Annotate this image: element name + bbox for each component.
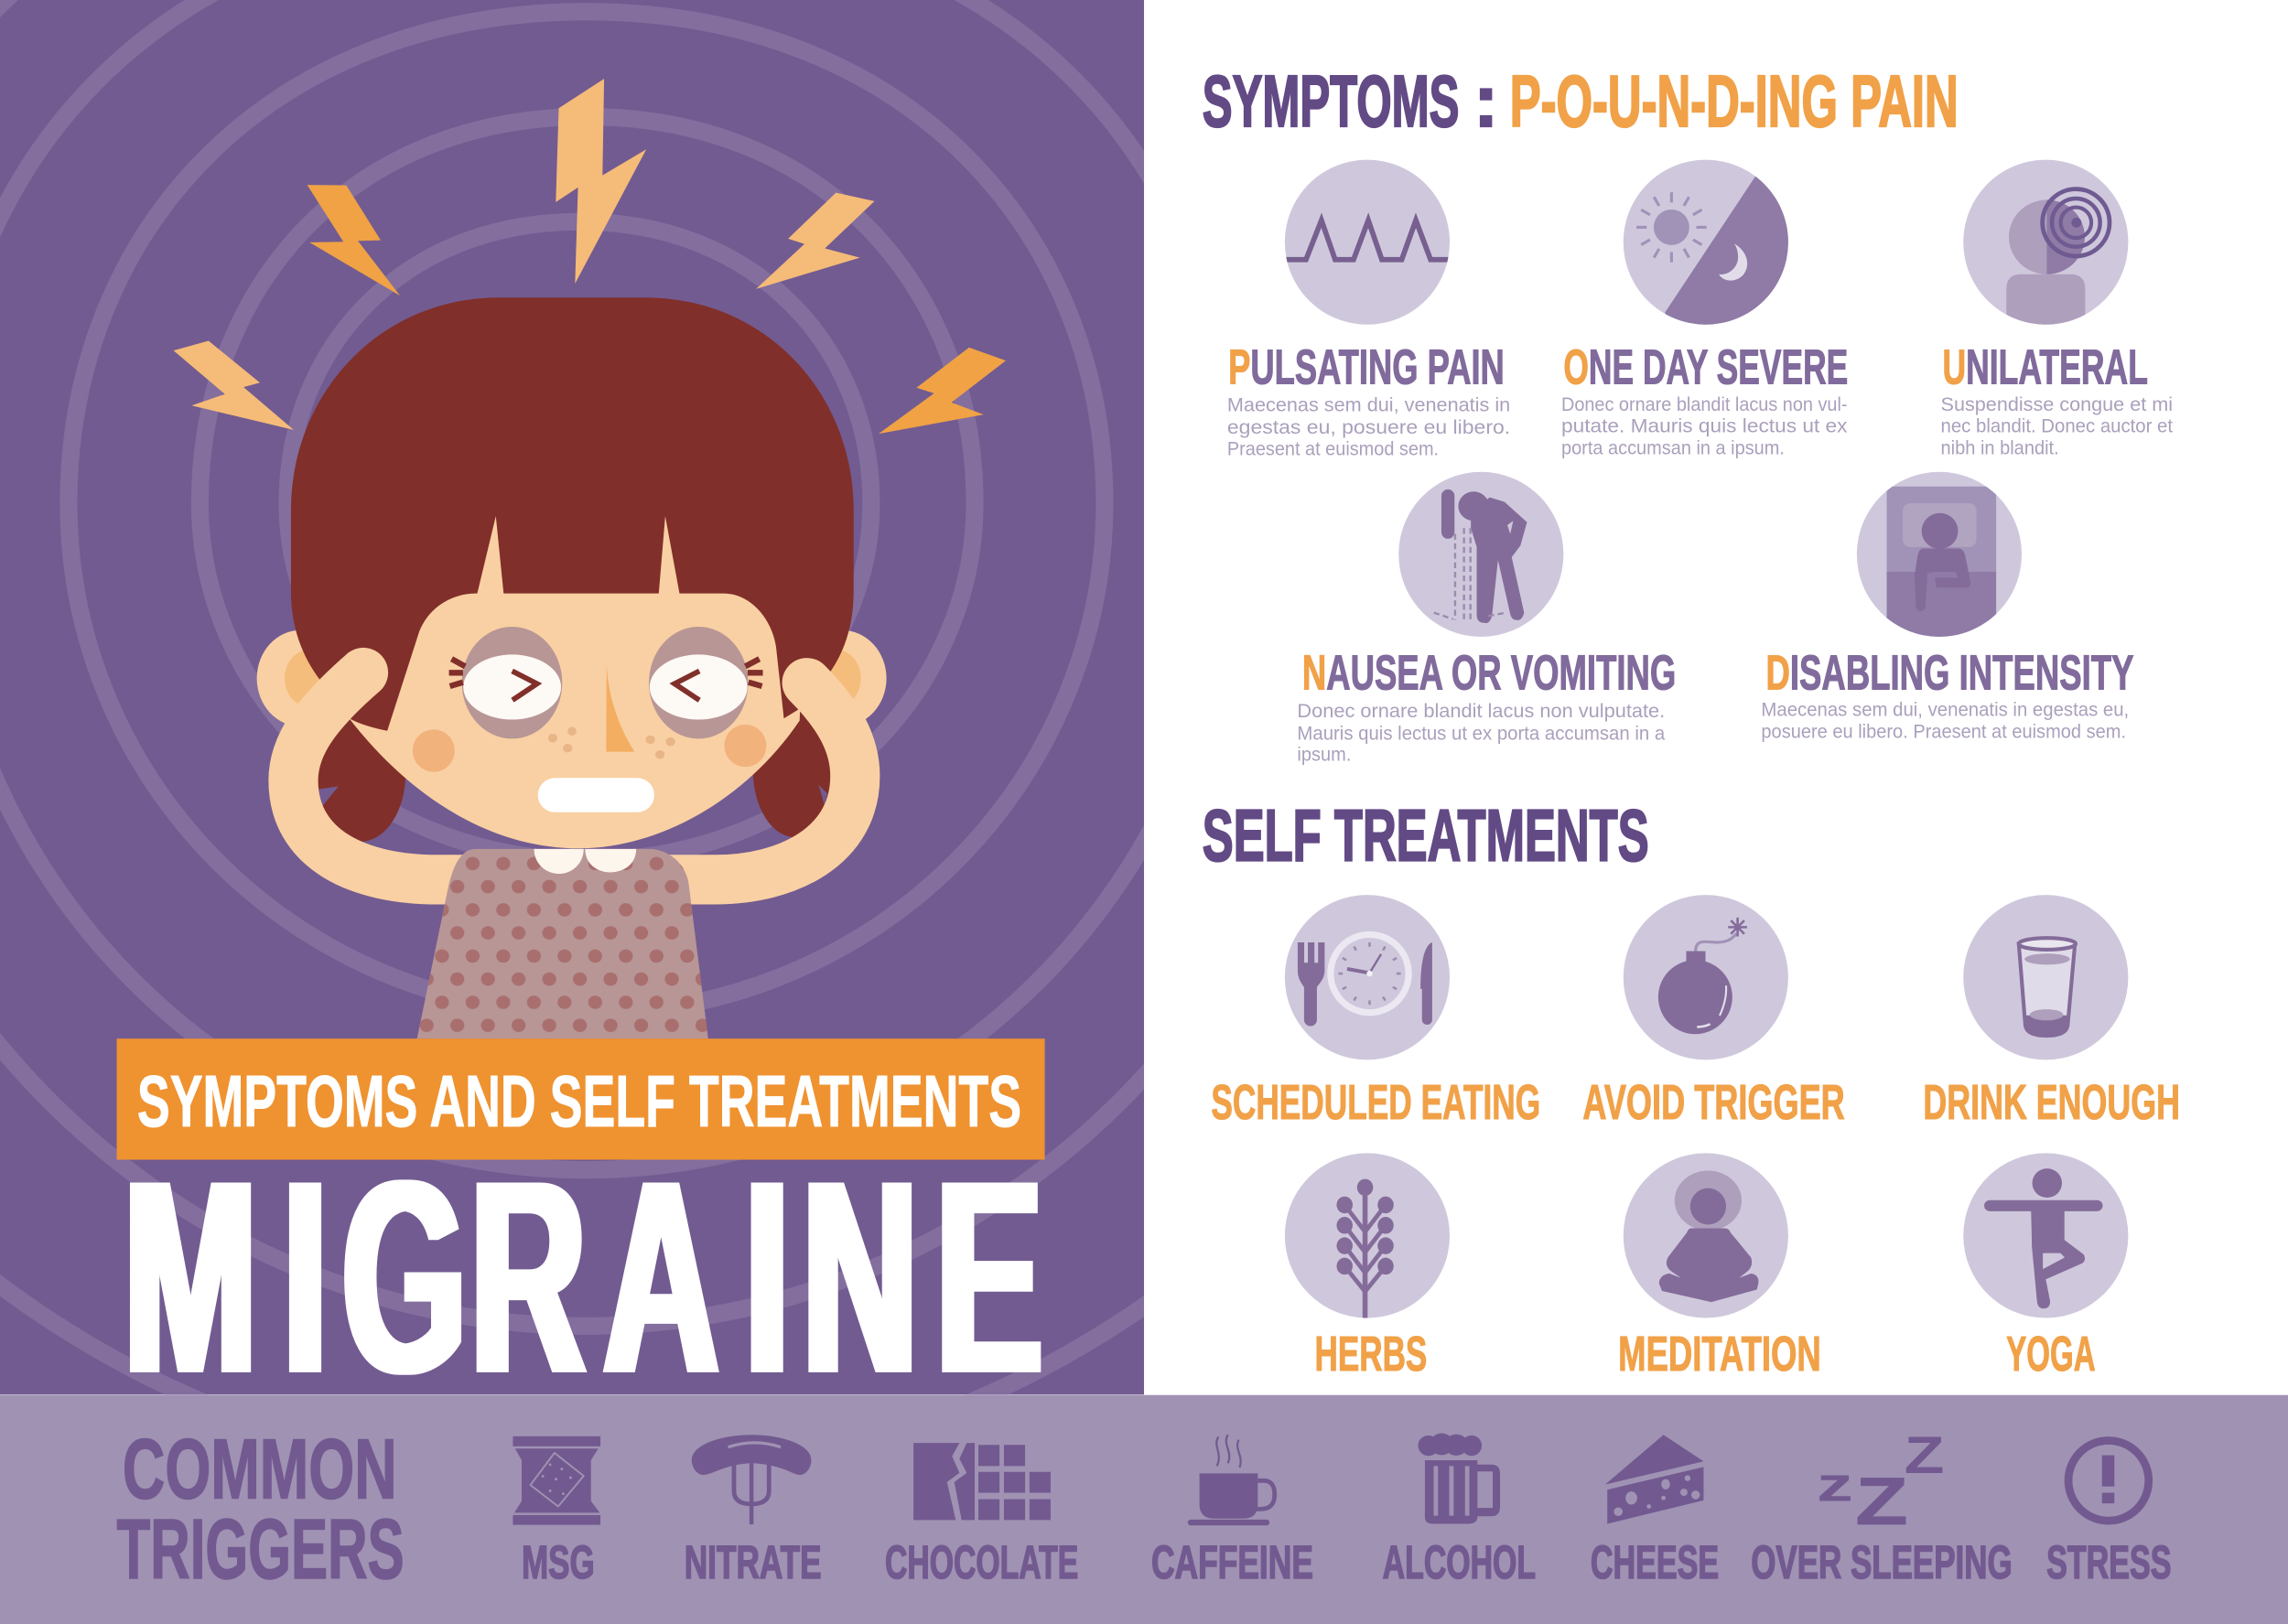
icon: person in bed [1887,487,1996,645]
icon: sun and moon [1636,177,1788,325]
symptom: pulsating pain: egestas eu, posuere eu libero. [1227,415,1510,438]
symptom: one day severe: Donec ornare blandit lacus non vul- [1561,393,1847,415]
symptom: unilateral: nec blandit. Donec auctor et [1941,414,2173,437]
treatment: yoga: YOGA [2006,1328,2096,1382]
heading: common triggers: TRIGGERS [117,1501,405,1597]
icon: sausage on fork [692,1435,811,1524]
icon: beer mug [1418,1433,1500,1523]
panel: left purple hero [0,0,1144,1394]
icon: zzz: z [1817,1458,1853,1512]
icon: head with one-sided pain [2006,189,2110,339]
symptom: unilateral: Suspendisse congue et mi [1941,393,2173,415]
icon: cracker pack [513,1436,600,1525]
icon: glass of water [2019,938,2076,1036]
treatment: avoid trigger: AVOID TRIGGER [1582,1076,1845,1130]
icon: zzz: Z [1905,1426,1945,1485]
treatment: meditation [1618,1153,1821,1382]
heading: common triggers [117,1421,405,1597]
icon: pulse wave [1284,220,1451,260]
trigger: caffeine: CAFFEINE [1151,1536,1313,1588]
treatment: avoid trigger [1582,895,1845,1130]
symptom: disabling intensity [1761,472,2133,743]
symptom: unilateral: UNILATERAL [1942,340,2148,394]
symptom: pulsating pain: Praesent at euismod sem. [1227,437,1439,460]
icon: yoga pose [1984,1168,2103,1308]
icon: cheese wedge [1605,1435,1703,1523]
trigger: over sleeping: OVER SLEEPING [1751,1536,2013,1588]
treatment: drink enough [1923,895,2180,1130]
treatment: scheduled eating [1211,895,1540,1130]
illustration: girl with headache [257,297,887,1038]
symptom: disabling intensity: Maecenas sem dui, venenatis in egestas eu, [1761,698,2129,721]
symptom: disabling intensity: DISABLING INTENSITY [1766,646,2133,700]
symptom: nausea or vomiting: Donec ornare blandit lacus non vulputate. [1297,699,1665,722]
heading: symptoms: : [1473,60,1498,142]
heading: self treatments: SELF TREATMENTS [1203,795,1649,877]
icon: herb sprig [1336,1179,1394,1318]
heading: symptoms: P-O-U-N-D-ING PAIN [1510,60,1959,142]
title: MIGRAINE [124,1124,1042,1432]
symptom: nausea or vomiting: ipsum. [1297,743,1351,766]
subtitle banner [117,1038,1045,1160]
symptom: nausea or vomiting [1297,472,1676,766]
trigger: caffeine [1151,1435,1313,1588]
symptom: one day severe: ONE DAY SEVERE [1563,340,1848,394]
heading: symptoms: SYMPTOMS [1203,60,1459,142]
trigger: stress: STRESS [2046,1536,2171,1588]
icon: zzz [1817,1426,1945,1539]
icon: person vomiting [1434,491,1527,623]
symptom: pulsating pain [1227,160,1510,460]
treatment: herbs [1285,1153,1450,1382]
treatment: herbs: HERBS [1315,1328,1427,1382]
trigger: nitrate: NITRATE [685,1536,822,1588]
trigger: cheese: CHEESE [1591,1536,1719,1588]
trigger: over sleeping [1751,1426,2013,1588]
heading: symptoms [1203,60,1959,142]
trigger: nitrate [685,1435,822,1588]
trigger: alcohol [1383,1433,1536,1588]
symptom: pulsating pain: PULSATING PAIN [1228,340,1505,394]
symptom: unilateral: nibh in blandit. [1941,436,2059,459]
treatment: scheduled eating: SCHEDULED EATING [1211,1076,1540,1130]
icon: lightning bolts [174,79,1006,434]
icon: warning circle [2068,1440,2149,1521]
trigger: chocolate: CHOCOLATE [885,1536,1078,1588]
treatment: yoga [1963,1153,2128,1382]
symptom: nausea or vomiting: NAUSEA OR VOMITING [1302,646,1676,700]
symptom: pulsating pain: Maecenas sem dui, venenatis in [1227,393,1510,416]
icon: meditating figure [1659,1170,1758,1302]
panel: symptoms [1203,60,2173,766]
trigger: MSG [513,1436,600,1588]
heading: common triggers: COMMON [123,1421,397,1516]
panel: common triggers strip [0,1395,2288,1624]
trigger: stress [2046,1440,2171,1588]
trigger: alcohol: ALCOHOL [1383,1536,1536,1588]
icon: bomb [1658,918,1747,1034]
icon: chocolate bar [913,1443,1051,1520]
symptom: one day severe: porta accumsan in a ipsum. [1561,436,1785,459]
trigger: MSG: MSG [522,1536,595,1588]
panel: self treatments [1203,795,2180,1382]
symptom: one day severe: putate. Mauris quis lectus ut ex [1561,414,1848,437]
treatment: meditation: MEDITATION [1618,1328,1821,1382]
trigger: cheese [1591,1435,1719,1588]
trigger: chocolate [885,1443,1078,1588]
symptom: unilateral [1941,160,2173,459]
icon: fork clock knife [1298,931,1432,1026]
symptom: disabling intensity: posuere eu libero. Praesent at euismod sem. [1761,720,2126,743]
subtitle banner: SYMPTOMS AND SELF TREATMENTS [137,1060,1021,1142]
symptom: one day severe [1561,145,1848,459]
symptom: nausea or vomiting: Mauris quis lectus ut ex porta accumsan in a [1297,721,1666,744]
icon: coffee cup [1188,1435,1275,1525]
icon: zzz: Z [1855,1464,1908,1539]
